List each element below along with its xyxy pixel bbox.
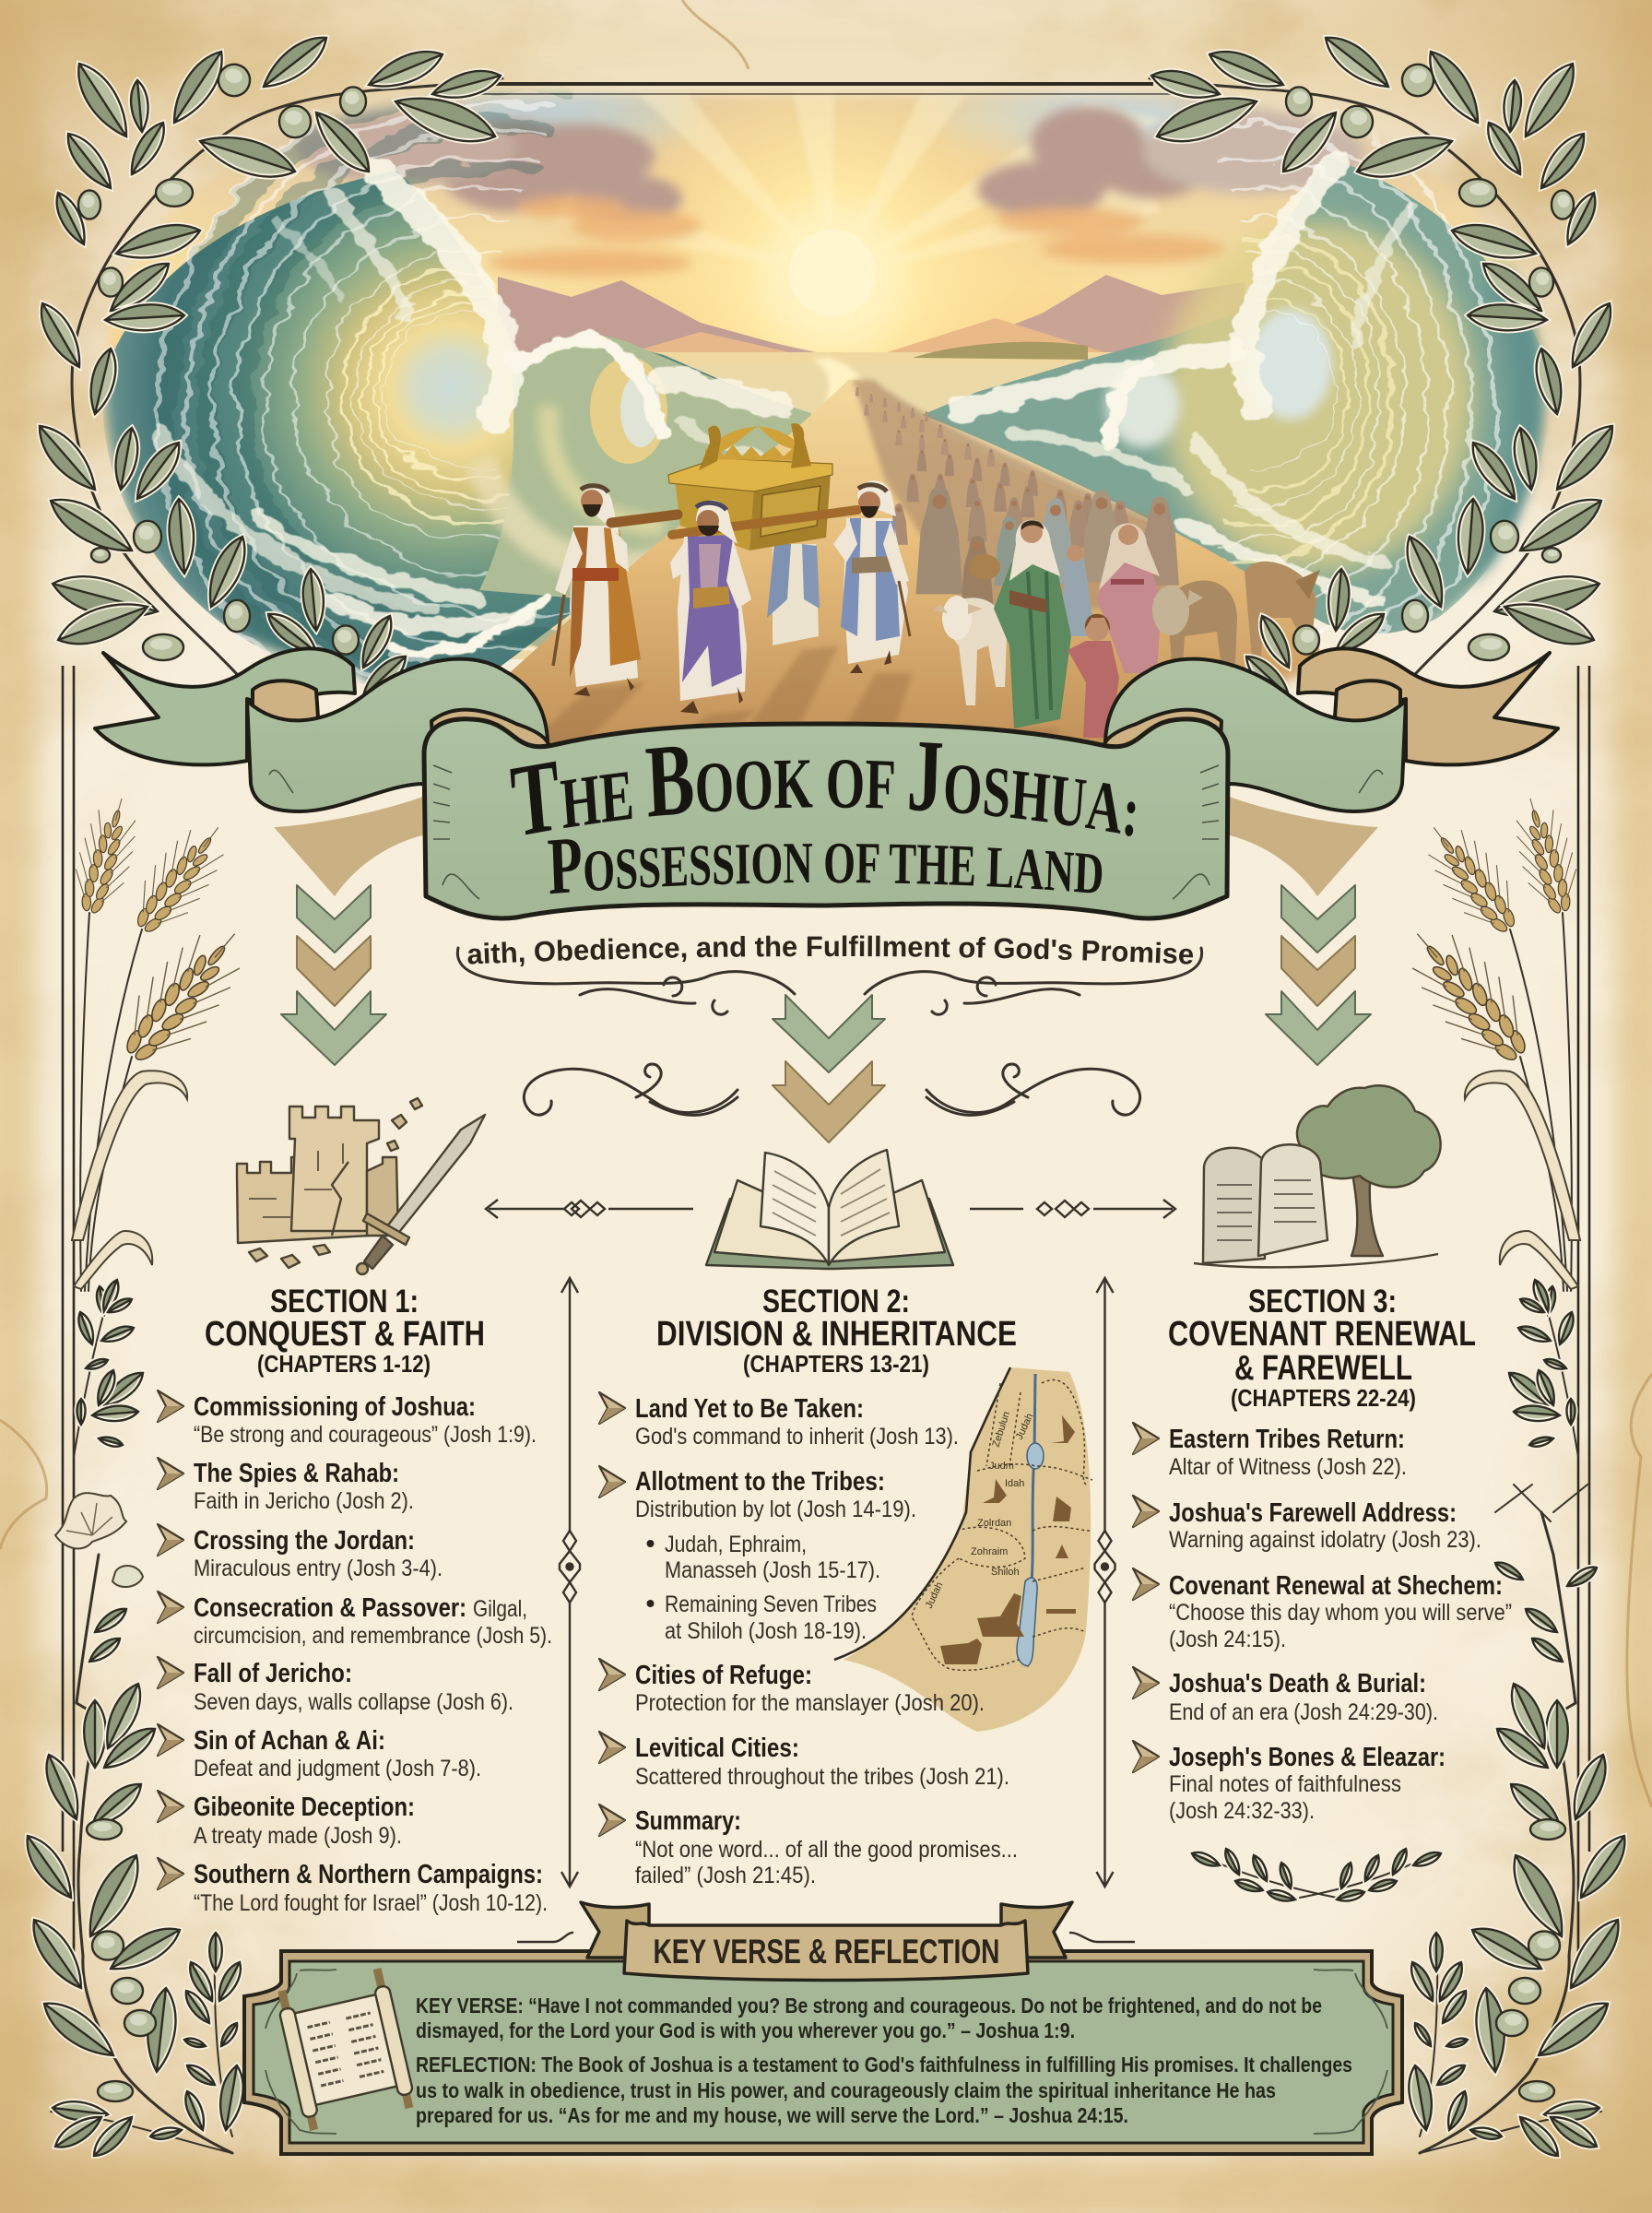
ribbon — [581, 1902, 1072, 1981]
carrying poles — [611, 510, 857, 535]
section 2 heading: (CHAPTERS 13-21) — [743, 1350, 929, 1378]
crowd of Israelites — [853, 380, 1179, 611]
funnel arrows: right column — [1220, 793, 1378, 1065]
section 1 heading: CONQUEST & FAITH — [205, 1315, 485, 1354]
section 2 heading: SECTION 2: — [762, 1284, 910, 1320]
item: levitical: Scattered throughout the tribes (Josh 21). — [635, 1764, 1009, 1790]
figure: man behind the ark — [767, 544, 820, 645]
banner: right ribbon — [1103, 648, 1558, 811]
item: consecration: Gilgal, — [473, 1596, 527, 1622]
wheat border: right — [1390, 791, 1587, 1291]
item: eastern tribes — [1133, 1423, 1407, 1480]
title line 1: THE BOOK OF JOSHUA: — [510, 742, 1136, 836]
icon: fallen castle and sword — [237, 1098, 485, 1274]
section 1: Conquest & Faith — [158, 1284, 552, 1916]
item: jericho: Fall of Jericho: — [194, 1659, 352, 1688]
section 1 heading — [205, 1284, 485, 1378]
item: commissioning — [158, 1391, 537, 1448]
item: shechem: (Josh 24:15). — [1169, 1627, 1286, 1652]
figure: woman in pink — [1097, 524, 1162, 673]
key verse text: KEY VERSE: “Have I not commanded you? Be strong and courageous. Do not be frightened, and do not be — [416, 1994, 1322, 2018]
banner: central panel — [424, 719, 1228, 918]
key verse text — [416, 1994, 1322, 2042]
key verse text: dismayed, for the Lord your God is with you wherever you go.” – Joshua 1:9. — [416, 2018, 1075, 2042]
panel frame — [244, 1951, 1402, 2154]
section 1 heading: (CHAPTERS 1-12) — [257, 1350, 431, 1378]
sub-bullets: Judah, Ephraim, — [665, 1532, 807, 1557]
arrow: from book to section 1 — [486, 1200, 693, 1218]
item: spies: Faith in Jericho (Josh 2). — [194, 1488, 414, 1514]
item: summary: failed” (Josh 21:45). — [635, 1863, 816, 1888]
map labels: Zolrdan — [977, 1518, 1011, 1529]
item: death: End of an era (Josh 24:29-30). — [1169, 1699, 1438, 1725]
item: consecration: circumcision, and remembrance (Josh 5). — [194, 1623, 552, 1649]
item: farewell: Joshua's Farewell Address: — [1169, 1498, 1457, 1528]
icon: open book — [706, 1150, 953, 1269]
center flourishes — [524, 1064, 1140, 1115]
map labels — [924, 1410, 1035, 1610]
item: summary — [599, 1805, 1018, 1888]
lower botanical border: left — [18, 1278, 247, 2162]
item: shechem — [1133, 1568, 1512, 1652]
center arrows — [773, 995, 885, 1142]
map of tribal allotments — [834, 1367, 1092, 1732]
item: consecration: Consecration & Passover: — [194, 1593, 466, 1623]
reflection text: REFLECTION: The Book of Joshua is a testament to God's faithfulness in fulfilling His promises. It challenges — [416, 2053, 1352, 2077]
figure: woman in green — [994, 520, 1071, 728]
item: gibeonite: Gibeonite Deception: — [194, 1793, 415, 1822]
section 2 heading: DIVISION & INHERITANCE — [656, 1315, 1017, 1354]
section 3 heading: SECTION 3: — [1248, 1284, 1397, 1320]
item: refuge: Cities of Refuge: — [635, 1661, 812, 1690]
item: eastern tribes: Eastern Tribes Return: — [1169, 1425, 1405, 1454]
map labels: Judah — [1014, 1412, 1035, 1441]
section 2 heading — [656, 1284, 1017, 1378]
figure: oxen — [1152, 562, 1320, 678]
item: levitical: Levitical Cities: — [635, 1734, 799, 1763]
sub-bullets — [647, 1532, 880, 1644]
corner swirls — [266, 1970, 1387, 2134]
banner: hatch marks — [269, 765, 1383, 899]
item: achan — [158, 1724, 481, 1781]
left water wall — [103, 73, 811, 747]
divider arrow: left — [560, 1278, 580, 1887]
ark of the covenant — [668, 423, 832, 550]
panel interior — [254, 1961, 1393, 2143]
item: farewell: Warning against idolatry (Josh 23). — [1169, 1527, 1481, 1553]
secondary curl — [479, 336, 811, 599]
title line 2: POSSESSION OF THE LAND — [548, 839, 1103, 894]
section 3 heading: (CHAPTERS 22-24) — [1231, 1384, 1416, 1412]
item: bones: Joseph's Bones & Eleazar: — [1169, 1743, 1446, 1772]
item: allotment: Distribution by lot (Josh 14-19). — [635, 1497, 916, 1522]
map labels: Zebulun — [990, 1410, 1012, 1449]
item: allotment — [599, 1466, 916, 1522]
map labels: Zohraim — [971, 1546, 1008, 1557]
river and water floor — [461, 358, 1217, 659]
item: crossing — [158, 1524, 442, 1581]
figure: man in orange mantle — [553, 486, 641, 696]
sub-bullets: Remaining Seven Tribes — [665, 1592, 877, 1617]
foam plumes — [157, 171, 784, 653]
section 3 heading — [1168, 1284, 1476, 1412]
item: achan: Defeat and judgment (Josh 7-8). — [194, 1756, 481, 1781]
reflection text — [416, 2053, 1352, 2127]
mountains — [498, 230, 1245, 364]
icon: stone tablets and tree — [1194, 1085, 1441, 1267]
sun — [789, 230, 876, 316]
section 2: Division & Inheritance — [599, 1284, 1018, 1888]
reflection text: us to walk in obedience, trust in His power, and courageously claim the spiritual inheritance He has — [416, 2078, 1276, 2102]
ribbon side swirls — [517, 1933, 1135, 1942]
item: farewell — [1133, 1496, 1481, 1553]
item: shechem: “Choose this day whom you will serve” — [1169, 1600, 1512, 1626]
item: commissioning: Commissioning of Joshua: — [194, 1392, 476, 1422]
item: refuge: Protection for the manslayer (Josh 20). — [635, 1690, 985, 1716]
item: land yet to be taken: Land Yet to Be Taken: — [635, 1394, 864, 1424]
map labels: Judm — [989, 1461, 1014, 1472]
olive wreath: right — [1149, 28, 1622, 703]
figure: woman in blue child — [1060, 545, 1095, 636]
item: gibeonite: A treaty made (Josh 9). — [194, 1823, 402, 1849]
sub-bullets: Manasseh (Josh 15-17). — [665, 1557, 880, 1583]
item: spies: The Spies & Rahab: — [194, 1459, 399, 1488]
item: campaigns: Southern & Northern Campaigns: — [194, 1860, 543, 1889]
panel: key verse and reflection — [244, 1902, 1402, 2154]
item: consecration — [158, 1592, 552, 1649]
item: shechem: Covenant Renewal at Shechem: — [1169, 1571, 1503, 1601]
map labels: Judah — [924, 1580, 945, 1610]
ribbon title: KEY VERSE & REFLECTION — [653, 1933, 999, 1970]
item: summary: Summary: — [635, 1806, 741, 1836]
section 1 heading: SECTION 1: — [270, 1284, 419, 1320]
lower botanical border: right — [1405, 1278, 1634, 2162]
item: jericho: Seven days, walls collapse (Josh 6). — [194, 1689, 513, 1715]
section 3 heading: & FAREWELL — [1234, 1349, 1412, 1388]
map labels: Shiloh — [991, 1567, 1020, 1578]
arrow: from book to section 3 — [970, 1200, 1175, 1218]
item: spies — [158, 1458, 414, 1514]
item: campaigns: “The Lord fought for Israel” (Josh 10-12). — [194, 1890, 548, 1916]
item: land yet to be taken: God's command to inherit (Josh 13). — [635, 1424, 959, 1450]
sand path — [433, 380, 1328, 756]
item: eastern tribes: Altar of Witness (Josh 22). — [1169, 1454, 1407, 1480]
figure: man in purple — [670, 500, 751, 714]
hero illustration: parted waters and the ark — [92, 73, 1567, 756]
icon: scroll — [275, 1967, 417, 2132]
frame lines — [63, 84, 1589, 1955]
item: death — [1133, 1667, 1438, 1725]
item: levitical — [599, 1732, 1009, 1790]
item: campaigns — [158, 1858, 548, 1916]
item: bones: Final notes of faithfulness — [1169, 1771, 1401, 1797]
item: gibeonite — [158, 1791, 415, 1849]
item: refuge — [599, 1659, 985, 1716]
item: allotment: Allotment to the Tribes: — [635, 1467, 885, 1497]
item: death: Joshua's Death & Burial: — [1169, 1669, 1426, 1698]
item: summary: “Not one word... of all the good promises... — [635, 1837, 1018, 1863]
figure: man in blue — [833, 480, 910, 673]
map labels: Idah — [1005, 1478, 1024, 1489]
section 3 heading: COVENANT RENEWAL — [1168, 1315, 1476, 1354]
figure: lamb — [933, 596, 1007, 705]
item: land yet to be taken — [599, 1392, 959, 1450]
section 3: Covenant Renewal & Farewell — [1133, 1284, 1512, 1824]
wheat border: left — [65, 791, 262, 1291]
figure: child in red — [1068, 614, 1119, 738]
small laurel under section 3 — [1190, 1847, 1443, 1904]
item: crossing: Crossing the Jordan: — [194, 1526, 415, 1556]
divider arrow: right — [1095, 1278, 1115, 1887]
reflection text: prepared for us. “As for me and my house, we will serve the Lord.” – Joshua 24:15. — [416, 2103, 1128, 2127]
olive wreath: left — [30, 28, 503, 703]
item: achan: Sin of Achan & Ai: — [194, 1726, 385, 1756]
item: crossing: Miraculous entry (Josh 3-4). — [194, 1556, 442, 1581]
item: bones: (Josh 24:32-33). — [1169, 1798, 1315, 1824]
item: commissioning: “Be strong and courageous” (Josh 1:9). — [194, 1422, 537, 1448]
funnel arrows: left column — [274, 793, 432, 1065]
right water wall — [922, 94, 1550, 723]
item: bones — [1133, 1741, 1446, 1824]
item: jericho — [158, 1657, 513, 1715]
sky — [101, 90, 1545, 352]
sub-bullets: at Shiloh (Josh 18-19). — [665, 1618, 867, 1644]
title banner — [93, 611, 1594, 920]
banner: left ribbon — [95, 648, 549, 811]
subtitle flourish — [457, 948, 1202, 1014]
icon: flower — [55, 1493, 143, 1587]
